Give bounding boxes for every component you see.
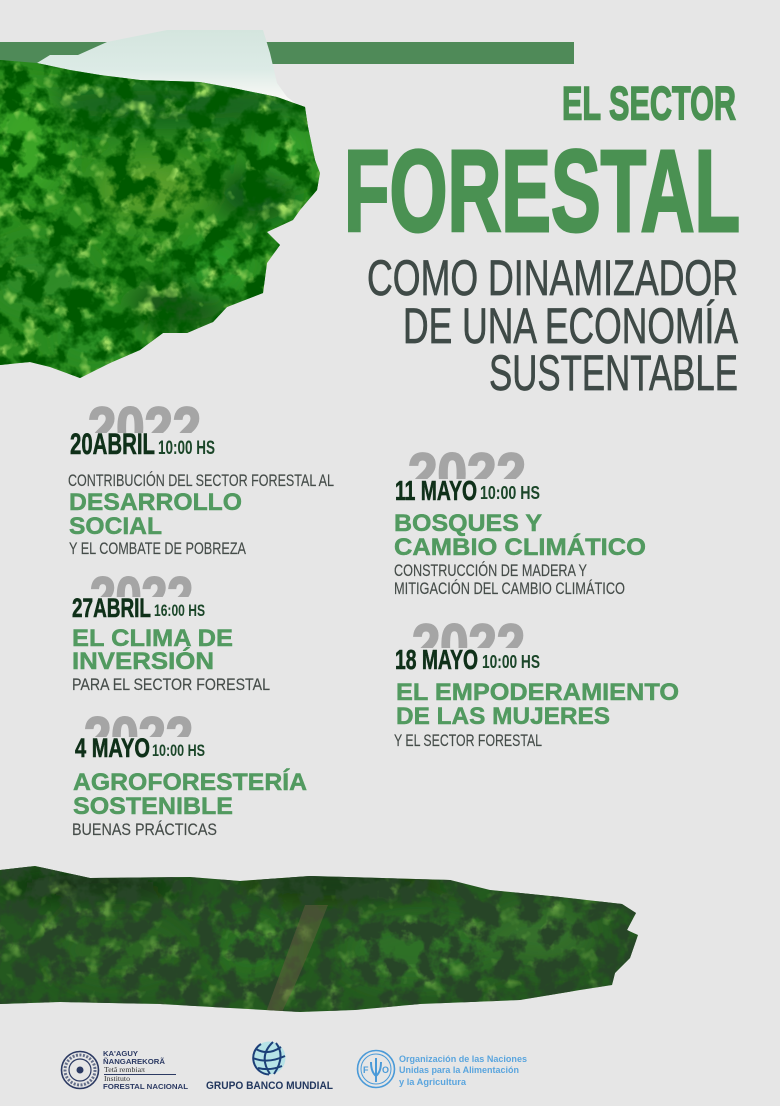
description: DESARROLLO [69, 489, 242, 516]
description: BUENAS PRÁCTICAS [72, 820, 217, 839]
organisation name: ÑANGAREKORÃ [103, 1057, 166, 1066]
description: CAMBIO CLIMÁTICO [394, 533, 646, 561]
forest path [266, 905, 328, 1012]
date and time: 4 MAYO [75, 733, 150, 763]
description: Y EL COMBATE DE POBREZA [69, 539, 246, 558]
organisation name: y la Agricultura [399, 1077, 467, 1088]
description: SOSTENIBLE [73, 793, 233, 820]
logo: Instituto Forestal Nacional [62, 1049, 188, 1091]
year: 2022 [84, 705, 193, 768]
logo: FAO [358, 1050, 527, 1088]
organisation name: Instituto [104, 1075, 131, 1083]
year: 2022 [412, 613, 525, 678]
description: AGROFORESTERÍA [73, 768, 307, 796]
date and time: 27ABRIL [72, 593, 151, 623]
date and time: 10:00 HS [482, 652, 540, 672]
organisation name: Unidas para la Alimentación [399, 1065, 519, 1076]
logo: Grupo Banco Mundial [206, 1042, 333, 1092]
year: 2022 [408, 442, 526, 507]
description [68, 471, 334, 558]
subtitle [367, 250, 738, 401]
description: INVERSIÓN [72, 647, 214, 675]
icon: FAO emblem: O [382, 1065, 389, 1075]
date and time: 20ABRIL [70, 428, 155, 461]
year: 2022 [88, 396, 201, 461]
date and time: 10:00 HS [152, 741, 205, 760]
event: 4 mayo [70, 705, 307, 839]
description: MITIGACIÓN DEL CAMBIO CLIMÁTICO [394, 579, 625, 598]
description: Y EL SECTOR FORESTAL [394, 731, 542, 750]
icon: FAO emblem [358, 1050, 394, 1088]
organisation name: GRUPO BANCO MUNDIAL [206, 1080, 333, 1092]
description: BOSQUES Y [394, 510, 542, 537]
date and time: 10:00 HS [480, 483, 540, 503]
icon: national seal [62, 1052, 98, 1088]
description: CONSTRUCCIÓN DE MADERA Y [394, 561, 587, 580]
organisation name [103, 1049, 188, 1091]
description: DE LAS MUJERES [396, 703, 610, 730]
description: CONTRIBUCIÓN DEL SECTOR FORESTAL AL [68, 471, 334, 490]
sky and clouds [37, 30, 305, 110]
organisation name: Organización de las Naciones [399, 1054, 527, 1065]
event: 18 mayo [390, 613, 679, 750]
date and time: 11 MAYO [395, 475, 477, 506]
description: EL EMPODERAMIENTO [396, 679, 679, 706]
icon: globe [252, 1042, 286, 1074]
photo: forest hillside [0, 30, 325, 385]
photo: aerial forest strip [0, 860, 645, 1015]
forest canopy [0, 55, 325, 385]
event: 20 abril [66, 396, 334, 558]
description: SOCIAL [69, 513, 162, 540]
date and time: 16:00 HS [154, 601, 205, 620]
description [72, 625, 270, 694]
icon: FAO emblem: F [363, 1065, 369, 1075]
description [394, 510, 646, 598]
description [394, 679, 679, 750]
description [72, 768, 307, 839]
description: PARA EL SECTOR FORESTAL [72, 675, 270, 694]
title [344, 76, 740, 401]
green top bar [0, 42, 574, 64]
event: 27 abril [68, 565, 270, 694]
year: 2022 [90, 565, 193, 628]
date and time: 18 MAYO [395, 644, 478, 675]
description: EL CLIMA DE [72, 625, 233, 652]
organisation name [399, 1054, 527, 1088]
date and time: 10:00 HS [158, 438, 215, 459]
organisation name: Tetã rembiaπ [104, 1066, 146, 1074]
event: 11 mayo [390, 442, 646, 598]
organisation name: KA'AGUY [103, 1049, 138, 1058]
organisation name: FORESTAL NACIONAL [103, 1082, 188, 1091]
